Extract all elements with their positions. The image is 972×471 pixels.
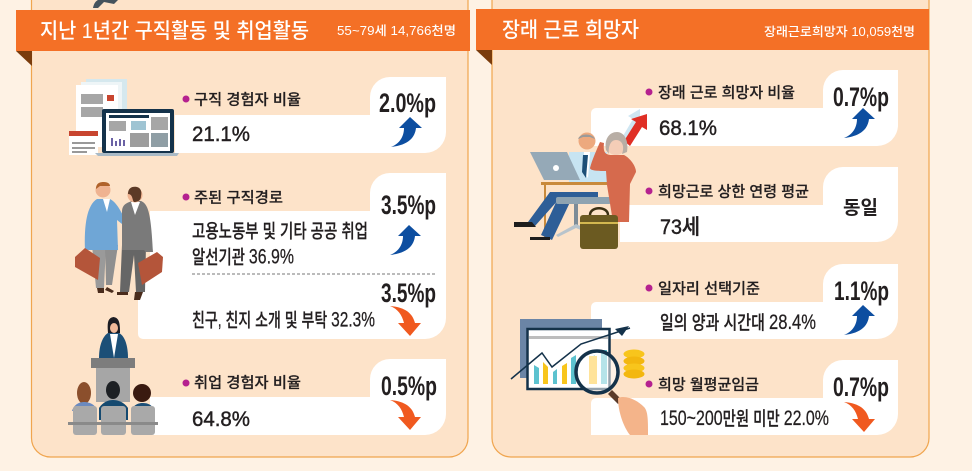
panel header: future work intention: 장래근로희망자 10,059천명 (764, 24, 915, 39)
card: main job search routes: 주된 구직경로 (194, 190, 283, 206)
card: average desired retirement age: 동일 (843, 197, 878, 219)
panel: future work intention (476, 0, 929, 457)
panel header: job search: 55~79세 14,766천명 (337, 23, 456, 38)
illustration: senior couple with laptop and briefcase (514, 109, 647, 249)
panel header: job search (16, 10, 470, 66)
illustration: speaker and audience (68, 317, 158, 435)
illustration: chart with magnifier, coins and hand (511, 319, 648, 435)
card: job selection criteria (591, 264, 898, 339)
card: job selection criteria: 1.1%p (834, 276, 889, 306)
card: main job search routes: 고용노동부 및 기타 공공 취업 (192, 220, 368, 242)
card: desired monthly wage: 150~200만원 미만 22.0% (660, 407, 829, 430)
card: main job search routes: 3.5%p (381, 278, 436, 308)
card: future work intention rate: 0.7%p (833, 82, 889, 112)
card: job search experience rate: 21.1% (192, 123, 250, 146)
card: average desired retirement age: 희망근로 상한 연령 평균 (658, 184, 809, 200)
card: future work intention rate: 68.1% (659, 117, 717, 140)
panel: job search and employment activity (16, 0, 470, 457)
illustration: two men with briefcases (75, 182, 163, 300)
card: job search experience rate: 2.0%p (379, 88, 436, 118)
card: average desired retirement age: 73세 (660, 216, 700, 239)
card: future work intention rate (591, 70, 898, 146)
card: job search experience rate (175, 77, 446, 153)
card: job selection criteria: 일의 양과 시간대 28.4% (660, 311, 816, 334)
card: employment experience rate: 64.8% (192, 408, 250, 431)
card: future work intention rate: 장래 근로 희망자 비율 (658, 84, 795, 102)
card: employment experience rate (150, 359, 446, 435)
card: main job search routes (138, 173, 446, 339)
card: job search experience rate: 구직 경험자 비율 (194, 92, 301, 108)
card: average desired retirement age (620, 167, 898, 242)
panel header: future work intention (476, 9, 929, 65)
card: employment experience rate: 0.5%p (381, 371, 437, 401)
card: job selection criteria: 일자리 선택기준 (658, 280, 760, 298)
panel header: job search: 지난 1년간 구직활동 및 취업활동 (40, 20, 309, 43)
panel header: future work intention: 장래 근로 희망자 (502, 19, 639, 42)
card: main job search routes: 알선기관 36.9% (192, 246, 294, 268)
card: desired monthly wage (591, 360, 898, 435)
illustration: documents and laptop (69, 79, 179, 156)
card: employment experience rate: 취업 경험자 비율 (194, 374, 301, 392)
card: desired monthly wage: 희망 월평균임금 (658, 376, 759, 394)
icon: figure fragment at top (93, 0, 118, 8)
card: main job search routes: 3.5%p (381, 190, 436, 220)
card: main job search routes: 친구, 친지 소개 및 부탁 32.3% (192, 308, 375, 332)
card: desired monthly wage: 0.7%p (833, 372, 889, 402)
